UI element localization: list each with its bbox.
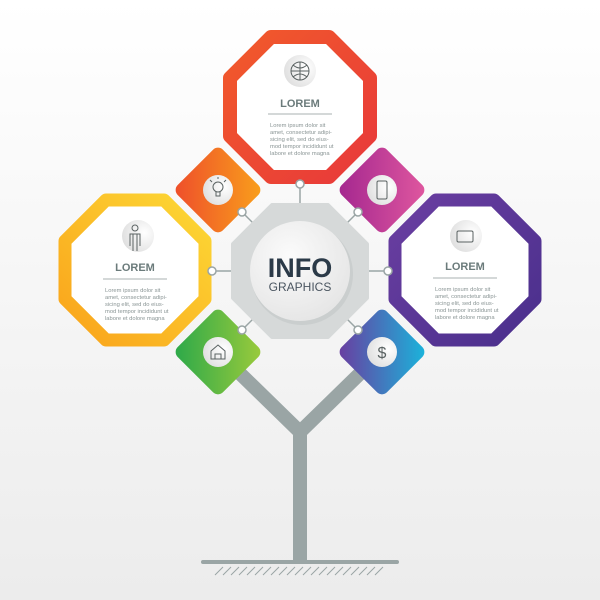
diamond: blue dollar — [337, 307, 427, 397]
diamond: blue dollar: $ — [378, 345, 387, 362]
text block: mod tempor incididunt ut — [270, 144, 334, 150]
connectors — [212, 184, 388, 330]
text block: sicing elit, sed do eius- — [435, 301, 494, 307]
text block: sicing elit, sed do eius- — [270, 137, 329, 143]
panel: left octagon — [65, 200, 205, 340]
icon: globe/ball — [284, 55, 316, 87]
heading: LOREM — [445, 261, 485, 273]
text block: amet, consectetur adipi- — [105, 295, 167, 301]
diamond: green house — [173, 307, 263, 397]
connector dots — [208, 180, 392, 334]
text block: labore et dolore magna — [105, 316, 165, 322]
title: INFO — [268, 253, 332, 283]
text block: Lorem ipsum dolor sit — [435, 287, 491, 293]
text block: Lorem ipsum dolor sit — [270, 123, 326, 129]
text block: mod tempor incididunt ut — [435, 308, 499, 314]
text block: mod tempor incididunt ut — [105, 309, 169, 315]
panel: right octagon — [395, 200, 535, 340]
text block: amet, consectetur adipi- — [435, 294, 497, 300]
heading: LOREM — [280, 98, 320, 110]
icon: person — [122, 220, 154, 252]
tree trunk and branches — [218, 352, 382, 562]
text block: labore et dolore magna — [435, 315, 495, 321]
text block: Lorem ipsum dolor sit — [105, 288, 161, 294]
text block: amet, consectetur adipi- — [270, 130, 332, 136]
panel: top octagon — [230, 37, 370, 177]
ground — [203, 562, 397, 575]
text block: sicing elit, sed do eius- — [105, 302, 164, 308]
center hub — [233, 205, 367, 337]
center hub: GRAPHICS — [269, 280, 331, 294]
heading: LOREM — [115, 262, 155, 274]
diamond: orange bulb — [173, 145, 263, 235]
text block: labore et dolore magna — [270, 151, 330, 157]
diamond: magenta phone — [337, 145, 427, 235]
icon: card — [450, 220, 482, 252]
